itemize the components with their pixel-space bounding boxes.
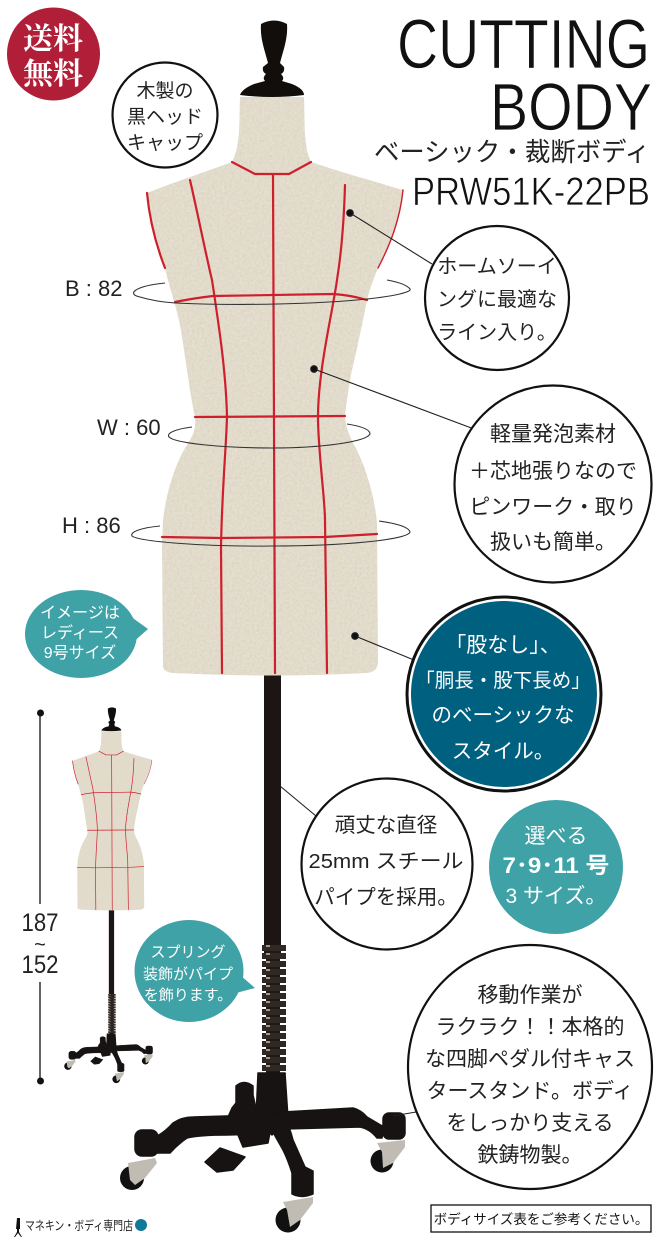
callout: caster stand: をしっかり支える xyxy=(446,1112,614,1135)
bust measurement: B : 82 xyxy=(65,276,122,301)
callout: 25mm steel pipe xyxy=(302,778,472,950)
waist measurement: W : 60 xyxy=(97,415,161,440)
free shipping badge: 送料 xyxy=(23,23,83,56)
callout: sewing lines: ホームソーイ xyxy=(437,256,557,278)
spring xyxy=(266,945,280,1075)
cast iron base xyxy=(135,1073,405,1196)
waist measurement xyxy=(97,415,370,448)
small full-height dress form xyxy=(64,707,157,1083)
red tape lines xyxy=(147,162,403,673)
callout: lightweight foam: 軽量発泡素材 xyxy=(490,423,616,446)
callout: wooden head cap: 木製の xyxy=(136,80,194,102)
blue callout: basic style: のベーシックな xyxy=(431,704,575,727)
shop logo: マネキン・ボディ専門店 xyxy=(25,1218,133,1233)
teal bubble: ladies size 9 xyxy=(25,590,148,678)
callout: caster stand: ラクラク！！本格的 xyxy=(436,1016,624,1039)
height range scale: 152 xyxy=(22,951,58,979)
callout: lightweight foam: 扱いも簡単。 xyxy=(490,531,616,554)
free shipping badge: 無料 xyxy=(23,58,83,91)
teal bubble: spring decoration: を飾ります。 xyxy=(144,987,232,1004)
teal bubble: spring decoration xyxy=(134,920,255,1022)
blue callout: basic style xyxy=(407,597,601,791)
callout: lightweight foam xyxy=(454,386,652,582)
hip measurement xyxy=(62,513,410,546)
callout: caster stand: タースタンド。ボディ xyxy=(426,1080,634,1103)
right caster xyxy=(370,1140,405,1172)
height range scale: 187 xyxy=(22,909,58,937)
shop logo xyxy=(14,1218,147,1237)
callout: 25mm steel pipe: 頑丈な直径 xyxy=(335,814,438,837)
teal badge: three sizes: 7･9･11 号 xyxy=(502,853,610,878)
teal badge: three sizes: 選べる xyxy=(524,825,588,848)
callout: caster stand: 移動作業が xyxy=(478,984,582,1007)
blue callout: basic style: 「股なし」、 xyxy=(445,634,561,657)
callout: 25mm steel pipe: 25mm スチール xyxy=(308,850,464,873)
size chart note: ボディサイズ表をご参考ください。 xyxy=(434,1211,648,1227)
callout: wooden head cap: 黒ヘッド xyxy=(127,107,203,128)
callout: 25mm steel pipe: パイプを採用。 xyxy=(314,886,458,909)
blue callout: basic style: スタイル。 xyxy=(452,740,554,763)
callout: sewing lines: ライン入り。 xyxy=(437,322,557,344)
callout: sewing lines xyxy=(425,226,569,370)
callout: wooden head cap: キャップ xyxy=(127,132,203,154)
callout: lightweight foam: ＋芯地張りなので xyxy=(469,460,637,483)
teal badge: three sizes xyxy=(489,800,623,934)
callout: caster stand: 鉄鋳物製。 xyxy=(478,1144,582,1167)
title xyxy=(397,5,652,214)
pole xyxy=(264,672,281,957)
callout: sewing lines: ングに最適な xyxy=(437,288,557,311)
teal bubble: ladies size 9: イメージは xyxy=(40,605,120,622)
leader lines xyxy=(280,210,482,1116)
subtitle: ベーシック・裁断ボディ xyxy=(374,137,650,167)
callout: caster stand xyxy=(408,945,652,1189)
height range scale: ~ xyxy=(34,934,46,956)
size chart note xyxy=(431,1205,651,1232)
linen torso xyxy=(130,90,420,690)
teal bubble: spring decoration: 装飾がパイプ xyxy=(143,966,233,983)
teal bubble: ladies size 9: レディース xyxy=(41,623,119,642)
callout: lightweight foam: ピンワーク・取り xyxy=(469,496,637,519)
height range scale xyxy=(22,710,58,1084)
teal bubble: ladies size 9: 9号サイズ xyxy=(44,644,116,662)
bust measurement xyxy=(65,276,410,304)
free shipping badge xyxy=(7,8,100,100)
callout: wooden head cap xyxy=(112,62,218,168)
teal badge: three sizes: 3 サイズ。 xyxy=(506,885,606,908)
callout: caster stand: な四脚ペダル付キャス xyxy=(425,1048,635,1071)
front-left caster xyxy=(120,1158,157,1190)
teal bubble: spring decoration: スプリング xyxy=(150,944,226,961)
blue callout: basic style: 「胴長・股下長め」 xyxy=(415,670,591,692)
front caster xyxy=(276,1197,313,1232)
large dress form with stand xyxy=(120,20,420,1232)
wooden head cap xyxy=(240,20,304,97)
hip measurement: H : 86 xyxy=(62,513,121,538)
